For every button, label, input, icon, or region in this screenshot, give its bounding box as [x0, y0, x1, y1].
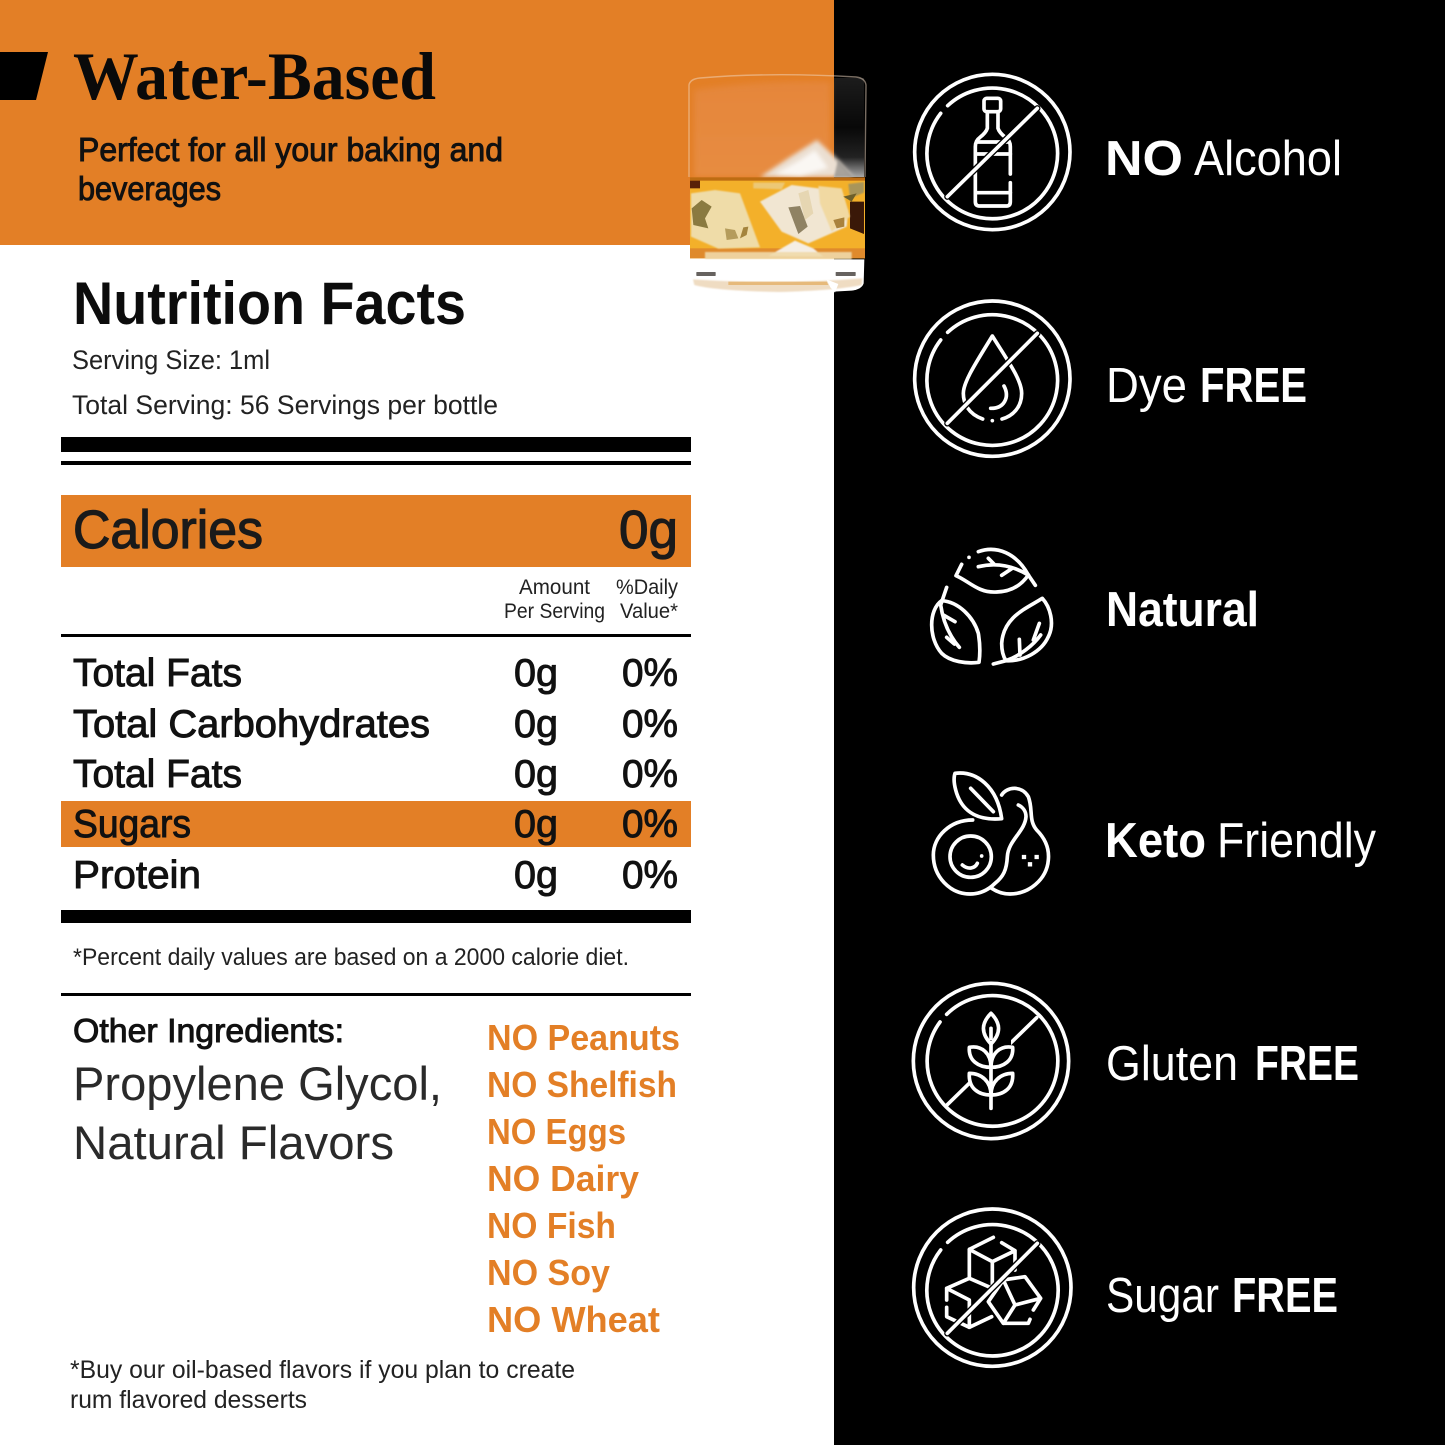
- glass of rum on ice: [689, 75, 866, 293]
- label: Sugar FREE: [1106, 1269, 1338, 1323]
- allergen list: NO Shelfish: [487, 1064, 677, 1105]
- glass upper wall on black: [834, 78, 864, 177]
- label: Keto Friendly: Keto: [1105, 814, 1206, 868]
- label: Keto Friendly: Friendly: [1217, 814, 1376, 868]
- nutrient rows: [73, 652, 678, 897]
- oil-based footnote: *Buy our oil-based flavors if you plan to create: [70, 1356, 575, 1384]
- nutrient rows: 0%: [622, 652, 678, 695]
- title: Water-Based: [73, 38, 436, 114]
- label: Dye FREE: Dye: [1106, 359, 1187, 413]
- calories row: [61, 495, 691, 567]
- nutrient rows: 0g: [514, 803, 558, 846]
- nutrient rows: 0%: [622, 703, 678, 746]
- icon: natural leaves: [932, 549, 1051, 664]
- glass upper wall tint on orange: [694, 82, 830, 177]
- icon: dye free: [915, 301, 1070, 456]
- column headers: Per Serving: [504, 600, 605, 623]
- label: Gluten FREE: FREE: [1255, 1037, 1359, 1091]
- nutrient rows: 0g: [514, 703, 558, 746]
- other ingredients: Propylene Glycol,: [73, 1057, 442, 1110]
- header marker: [0, 52, 48, 100]
- column headers: [504, 576, 678, 623]
- oil-based footnote: [70, 1356, 575, 1414]
- glass base: [692, 259, 864, 293]
- label: Dye FREE: FREE: [1200, 359, 1307, 413]
- allergen list: NO Eggs: [487, 1111, 626, 1152]
- subtitle: [78, 131, 503, 207]
- label: NO Alcohol: [1105, 132, 1342, 186]
- oil-based footnote: rum flavored desserts: [70, 1386, 307, 1414]
- nutrient rows: 0g: [514, 854, 558, 897]
- allergen list: [487, 1017, 680, 1340]
- nutrient rows: Total Fats: [73, 753, 242, 796]
- serving divider bars: [61, 437, 691, 465]
- column headers: Amount: [519, 576, 590, 599]
- other ingredients: Natural Flavors: [73, 1116, 394, 1169]
- calories row: Calories: [73, 500, 263, 560]
- panel: orange header: [0, 0, 834, 245]
- nutrient rows: Total Carbohydrates: [73, 703, 430, 746]
- icon: sugar free: [914, 1209, 1071, 1366]
- icon: no alcohol: [915, 74, 1070, 230]
- serving information: Serving Size: 1ml: [72, 345, 270, 375]
- other ingredients: [73, 1012, 442, 1169]
- nutrient rows: Protein: [73, 854, 201, 897]
- daily value footnote: *Percent daily values are based on a 2000 calorie diet.: [73, 944, 629, 971]
- panel: black benefits column: [834, 0, 1445, 1445]
- label: Gluten FREE: [1106, 1037, 1359, 1091]
- column headers: Value*: [620, 600, 678, 623]
- glass rim: [689, 75, 866, 177]
- nutrient rows: 0%: [622, 854, 678, 897]
- label: NO Alcohol: NO: [1105, 132, 1183, 186]
- column headers: %Daily: [616, 576, 678, 599]
- nutrient rows: 0g: [514, 753, 558, 796]
- subtitle: Perfect for all your baking and: [78, 131, 503, 168]
- nutrient rows: 0%: [622, 753, 678, 796]
- label: Dye FREE: [1106, 359, 1307, 413]
- subtitle: beverages: [78, 170, 221, 207]
- nutrient rows: Sugars: [73, 803, 191, 846]
- label: Keto Friendly: [1105, 814, 1376, 868]
- serving information: Total Serving: 56 Servings per bottle: [72, 390, 498, 420]
- liquid: [690, 177, 865, 259]
- nutrient rows: 0g: [514, 652, 558, 695]
- icon: keto avocado: [933, 773, 1049, 894]
- allergen list: NO Dairy: [487, 1158, 639, 1199]
- sugars highlight: [61, 801, 691, 847]
- allergen list: NO Peanuts: [487, 1017, 680, 1058]
- label: Natural: Natural: [1106, 583, 1259, 637]
- icon: gluten free: [913, 983, 1069, 1139]
- nutrient rows: 0%: [622, 803, 678, 846]
- allergen list: NO Wheat: [487, 1299, 660, 1340]
- label: Sugar FREE: Sugar: [1106, 1269, 1219, 1323]
- label: Gluten FREE: Gluten: [1106, 1037, 1238, 1091]
- allergen list: NO Fish: [487, 1205, 616, 1246]
- other ingredients: Other Ingredients:: [73, 1012, 344, 1049]
- allergen list: NO Soy: [487, 1252, 610, 1293]
- heading: Nutrition Facts: Nutrition Facts: [73, 270, 466, 337]
- label: Sugar FREE: FREE: [1232, 1269, 1338, 1323]
- calories row: 0g: [619, 500, 678, 560]
- label: NO Alcohol: Alcohol: [1194, 132, 1342, 186]
- nutrient rows: Total Fats: [73, 652, 242, 695]
- ice above liquid: [760, 140, 853, 177]
- serving information: [72, 345, 498, 420]
